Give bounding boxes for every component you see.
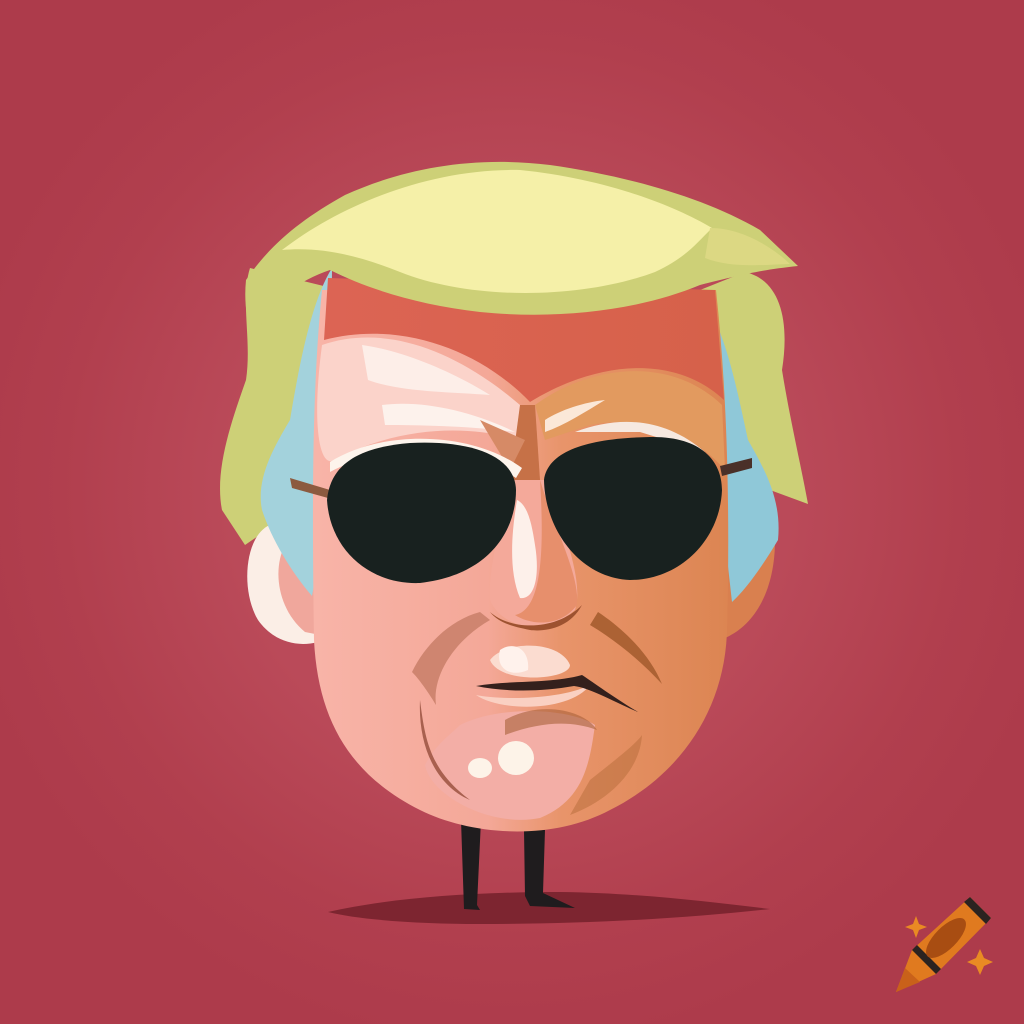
- hair top: [245, 162, 798, 340]
- mouth area highlights: [490, 646, 570, 678]
- cheek folds: [412, 612, 490, 705]
- ear left: [247, 525, 330, 644]
- logo: crayon: [896, 897, 993, 992]
- sunglasses: [290, 437, 752, 583]
- brow crease: [510, 405, 540, 480]
- right forehead shading: [535, 371, 725, 470]
- face: [313, 278, 728, 831]
- chin highlights: [498, 741, 534, 775]
- side hair blue: [261, 268, 779, 602]
- nose: [490, 480, 577, 627]
- forehead: [324, 278, 724, 402]
- ground shadow: [328, 892, 770, 924]
- hair back: [220, 268, 808, 545]
- legs: [461, 820, 575, 910]
- chin: [425, 711, 595, 820]
- left forehead highlight: [317, 338, 520, 461]
- mouth: [476, 675, 638, 712]
- ear right: [720, 500, 775, 638]
